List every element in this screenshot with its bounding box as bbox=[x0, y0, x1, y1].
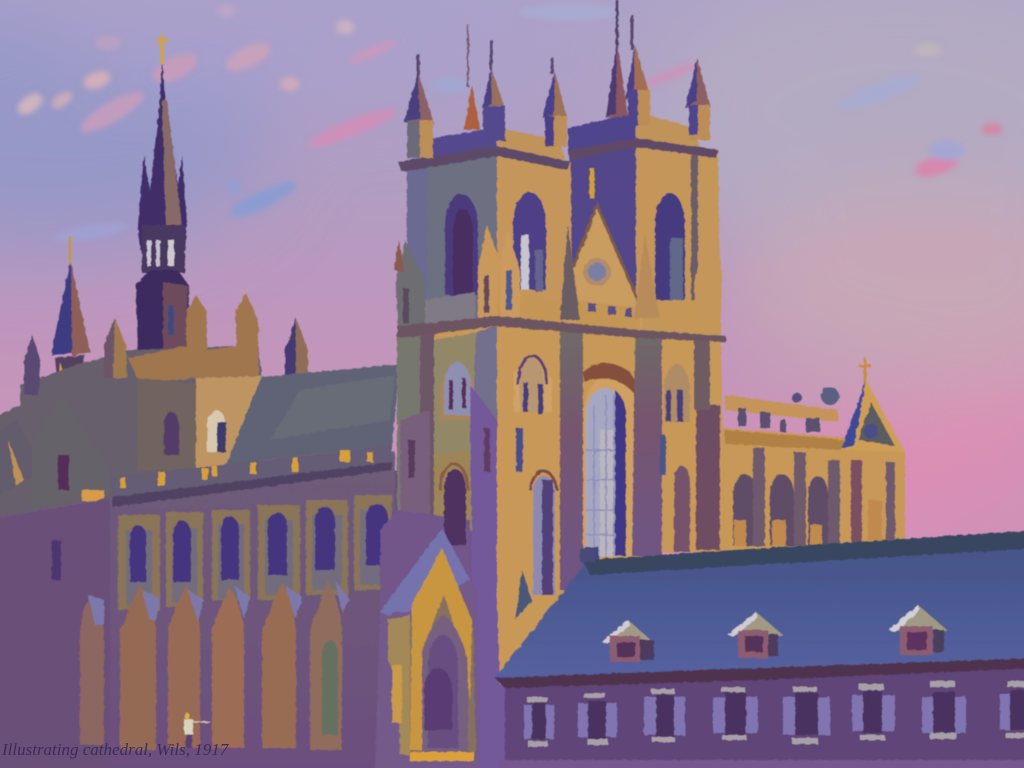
left tall spire bbox=[136, 34, 189, 356]
window sills bbox=[527, 681, 1024, 747]
right wing bbox=[722, 358, 905, 552]
nave roof bbox=[226, 364, 400, 465]
shutters bbox=[524, 694, 1010, 739]
base masses behind the buildings bbox=[0, 470, 1024, 768]
signature text: Illustrating cathedral, Wils, 1917 bbox=[1, 740, 230, 759]
left tower bbox=[380, 128, 572, 768]
left nave wall bbox=[0, 445, 395, 768]
tower spires and pinnacles bbox=[394, 25, 722, 332]
icon: gold cross bbox=[156, 34, 168, 64]
dormers bbox=[602, 605, 948, 662]
left upper transept and turrets bbox=[0, 293, 308, 520]
foreground roof bbox=[493, 530, 1024, 680]
grey bay centres bbox=[126, 510, 388, 605]
right tower bbox=[568, 0, 724, 552]
figure bbox=[184, 713, 210, 748]
lower pointed arches bbox=[80, 580, 342, 750]
left small spire bbox=[51, 236, 90, 388]
blue buttress caps bbox=[88, 580, 350, 625]
foreground wall with shuttered windows bbox=[495, 658, 1024, 768]
window panes bbox=[532, 690, 1024, 739]
central great window and right tower lower bays bbox=[397, 300, 726, 590]
balustrade gold accents bbox=[120, 450, 373, 488]
front gothic portal bbox=[184, 528, 480, 768]
ochre bays bbox=[118, 495, 392, 610]
clouds bbox=[14, 4, 1003, 245]
central gable with rose window bbox=[560, 168, 642, 335]
arcade windows bbox=[130, 504, 388, 582]
